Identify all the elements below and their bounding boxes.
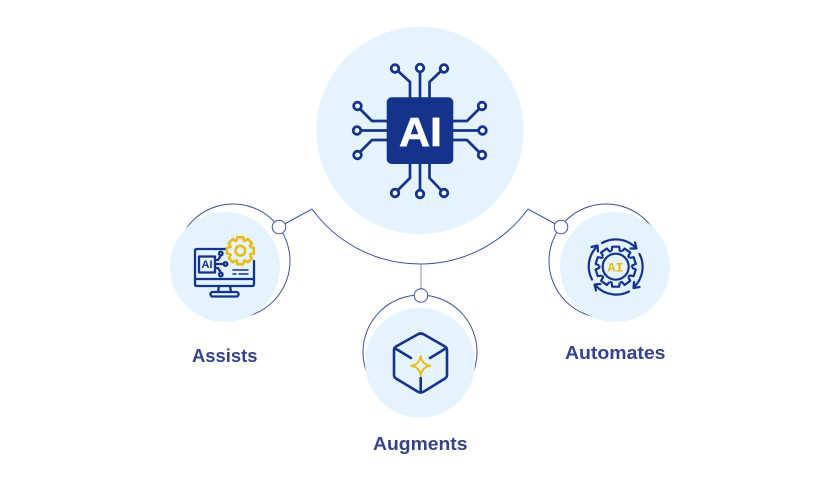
label: Automates xyxy=(565,343,666,363)
gear xyxy=(227,237,254,264)
cube xyxy=(394,334,447,392)
circle background xyxy=(560,212,670,322)
icon: cube with sparkle xyxy=(394,334,447,392)
cycle arrows xyxy=(589,239,643,295)
circle background xyxy=(170,212,280,322)
icon: monitor with AI and gear xyxy=(195,237,254,296)
chip terminals xyxy=(353,64,486,198)
circle background xyxy=(365,308,475,418)
gear xyxy=(595,247,637,287)
label: Augments xyxy=(373,434,468,454)
node xyxy=(414,289,428,302)
panel: Automates xyxy=(549,204,670,363)
icon: AI chip xyxy=(353,64,486,198)
chip label: AI xyxy=(399,109,442,155)
panel: Assists xyxy=(170,204,290,366)
connector: curved arc with branches xyxy=(279,209,561,289)
panel: main AI circle xyxy=(316,27,524,234)
sparkle xyxy=(411,356,430,376)
chip body xyxy=(387,97,453,164)
label: Assists xyxy=(192,346,258,366)
monitor AI label: AI xyxy=(202,259,212,271)
main circle background xyxy=(316,27,524,234)
ring xyxy=(549,204,663,318)
node xyxy=(554,220,568,234)
ring xyxy=(363,295,477,409)
chip traces xyxy=(360,71,479,190)
ring xyxy=(176,204,290,318)
icon: gear with cycle arrows xyxy=(589,239,643,295)
gear AI label: AI xyxy=(608,262,624,276)
panel: Augments xyxy=(363,289,477,454)
node xyxy=(272,220,286,234)
monitor xyxy=(195,249,254,296)
